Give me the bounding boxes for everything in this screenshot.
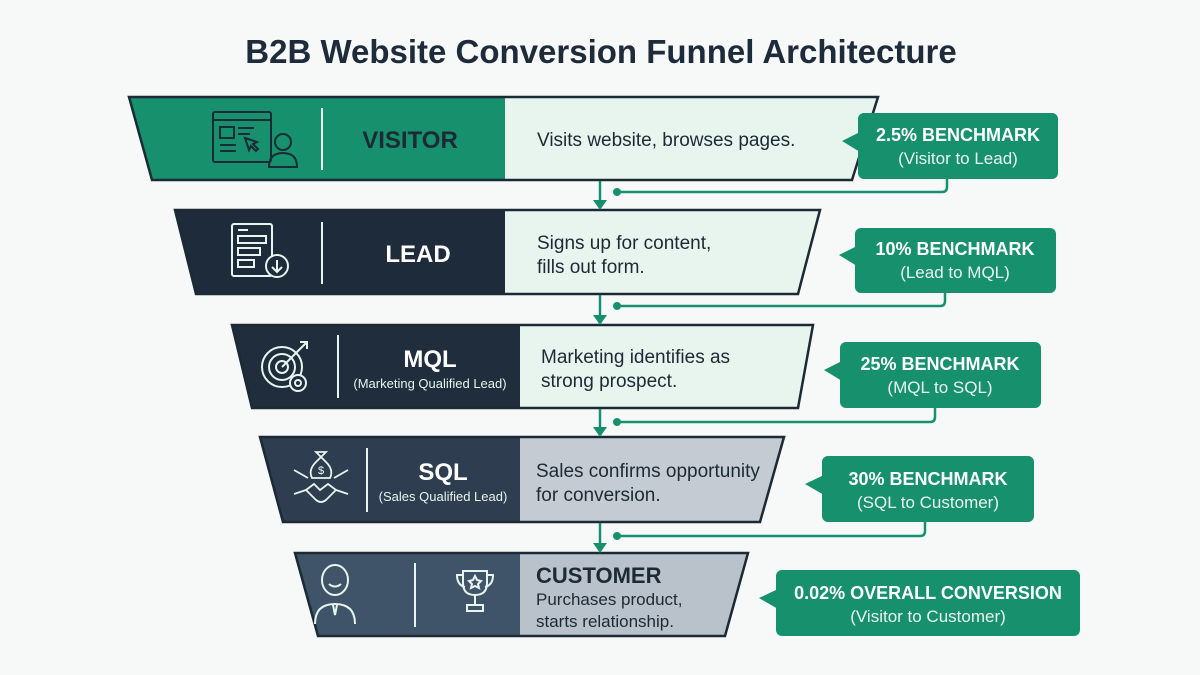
band: mql: (Marketing Qualified Lead) bbox=[353, 376, 507, 391]
callout: visitor to lead bbox=[842, 113, 1058, 179]
callout: visitor to lead: (Visitor to Lead) bbox=[898, 149, 1018, 168]
callout: sql to customer bbox=[805, 456, 1034, 522]
band: lead: Signs up for content, bbox=[537, 233, 711, 254]
band: visitor bbox=[129, 97, 878, 180]
callout: mql to sql: (MQL to SQL) bbox=[887, 378, 993, 397]
band: visitor: Visits website, browses pages. bbox=[537, 130, 795, 151]
band: mql: Marketing identifies as bbox=[541, 347, 730, 368]
icon: browser with user bbox=[213, 112, 297, 167]
callout: overall conversion bbox=[759, 570, 1080, 636]
band: customer: starts relationship. bbox=[536, 612, 674, 631]
callout: visitor to lead: 2.5% BENCHMARK bbox=[876, 125, 1040, 145]
band: sql: SQL bbox=[418, 459, 468, 486]
band: mql bbox=[232, 325, 813, 408]
band: mql: strong prospect. bbox=[541, 371, 677, 392]
icon: trophy bbox=[457, 571, 493, 611]
callout: sql to customer: 30% BENCHMARK bbox=[848, 469, 1008, 489]
band: sql: Sales confirms opportunity bbox=[536, 461, 760, 482]
callout: mql to sql bbox=[824, 342, 1041, 408]
band: customer bbox=[295, 553, 748, 636]
band: lead bbox=[175, 210, 820, 294]
callout: lead to mql bbox=[839, 228, 1056, 293]
icon: target with gear bbox=[262, 342, 307, 391]
callout: sql to customer: (SQL to Customer) bbox=[857, 493, 999, 512]
callout: mql to sql: 25% BENCHMARK bbox=[860, 354, 1020, 374]
icon: handshake with money bag bbox=[294, 452, 348, 502]
band: sql bbox=[260, 437, 784, 522]
title: B2B Website Conversion Funnel Architecture bbox=[245, 33, 957, 70]
arrows: funnel connectors bbox=[600, 179, 947, 545]
band: lead: fills out form. bbox=[537, 257, 645, 278]
icon: person bbox=[315, 565, 355, 624]
icon: form download bbox=[232, 224, 288, 277]
callout: overall conversion: (Visitor to Customer) bbox=[850, 607, 1006, 626]
band: customer: Purchases product, bbox=[536, 590, 682, 609]
band: mql: MQL bbox=[403, 346, 457, 373]
icon: handshake with money bag: $ bbox=[318, 465, 324, 477]
band: sql: for conversion. bbox=[536, 485, 661, 506]
callout: lead to mql: 10% BENCHMARK bbox=[875, 239, 1035, 259]
band: visitor: VISITOR bbox=[362, 127, 458, 154]
band: customer: CUSTOMER bbox=[536, 563, 662, 588]
callout: lead to mql: (Lead to MQL) bbox=[900, 263, 1010, 282]
band: lead: LEAD bbox=[385, 241, 451, 268]
band: sql: (Sales Qualified Lead) bbox=[379, 489, 507, 504]
callout: overall conversion: 0.02% OVERALL CONVERSION bbox=[794, 583, 1062, 603]
